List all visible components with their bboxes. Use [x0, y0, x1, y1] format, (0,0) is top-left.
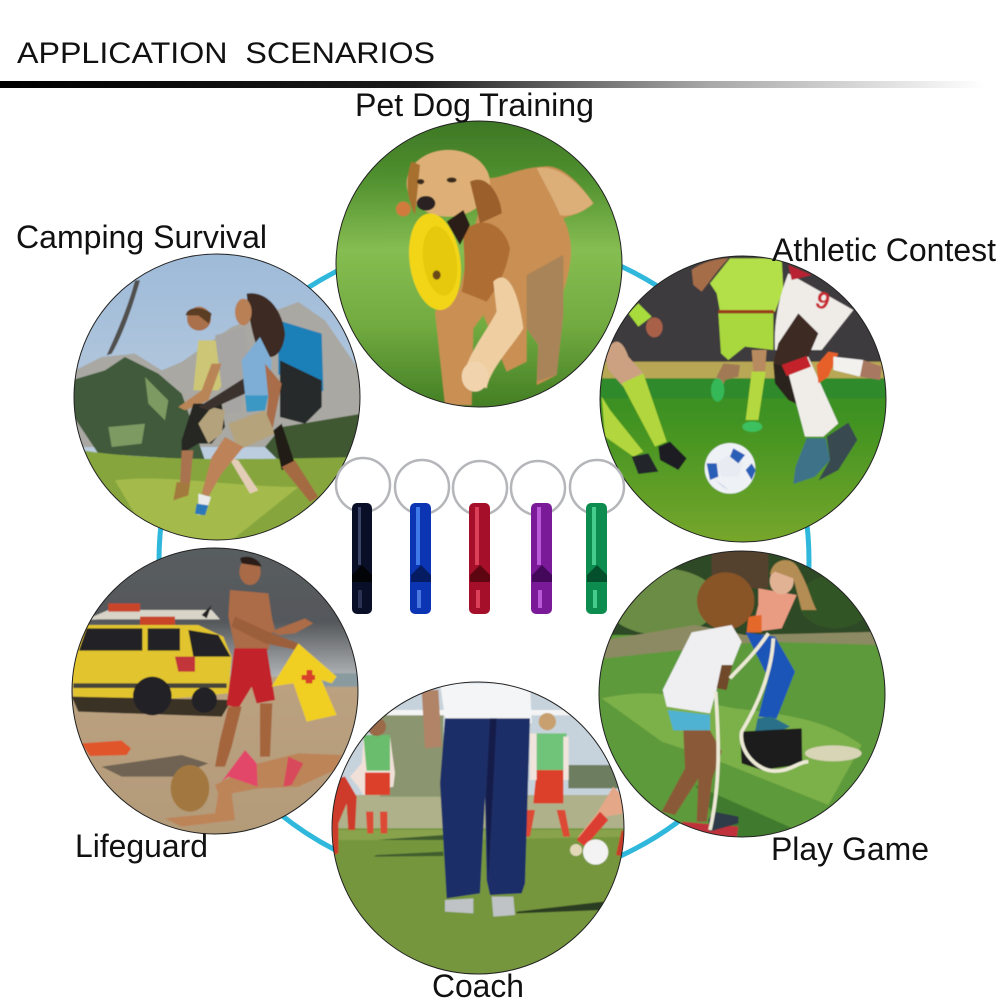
- title underline bar: [0, 81, 985, 88]
- photo: play game: [595, 545, 895, 845]
- label: play game: Play Game: [771, 831, 929, 867]
- whistle: navy: [336, 458, 390, 614]
- photo: athletic contest: 9: [812, 286, 833, 316]
- photo: camping survival: [65, 247, 365, 547]
- photo outline: lifeguard: [72, 548, 358, 834]
- label: camping survival: Camping Survival: [16, 219, 267, 255]
- photo: coach: [330, 680, 630, 980]
- whistle: blue: [395, 460, 449, 614]
- whistles with key rings: [336, 458, 624, 614]
- whistle: green: [570, 460, 624, 614]
- label: pet dog training: Pet Dog Training: [355, 87, 594, 123]
- photo outline: dog: [336, 121, 622, 407]
- photo: lifeguard: [65, 540, 365, 840]
- photo outline: camping: [74, 254, 360, 540]
- whistle: red: [453, 461, 507, 614]
- photo outline: soccer: [600, 256, 886, 542]
- photo outline: game: [599, 551, 885, 837]
- label: athletic contest: Athletic Contest: [772, 232, 996, 268]
- label: lifeguard: Lifeguard: [75, 828, 208, 864]
- photo: pet dog training: [330, 115, 630, 415]
- photo outline: coach: [332, 682, 624, 974]
- whistle: purple: [511, 461, 565, 614]
- title: APPLICATION SCENARIOS: [17, 37, 435, 70]
- photo: athletic contest: [595, 250, 895, 550]
- connecting cyan ring: [159, 236, 809, 886]
